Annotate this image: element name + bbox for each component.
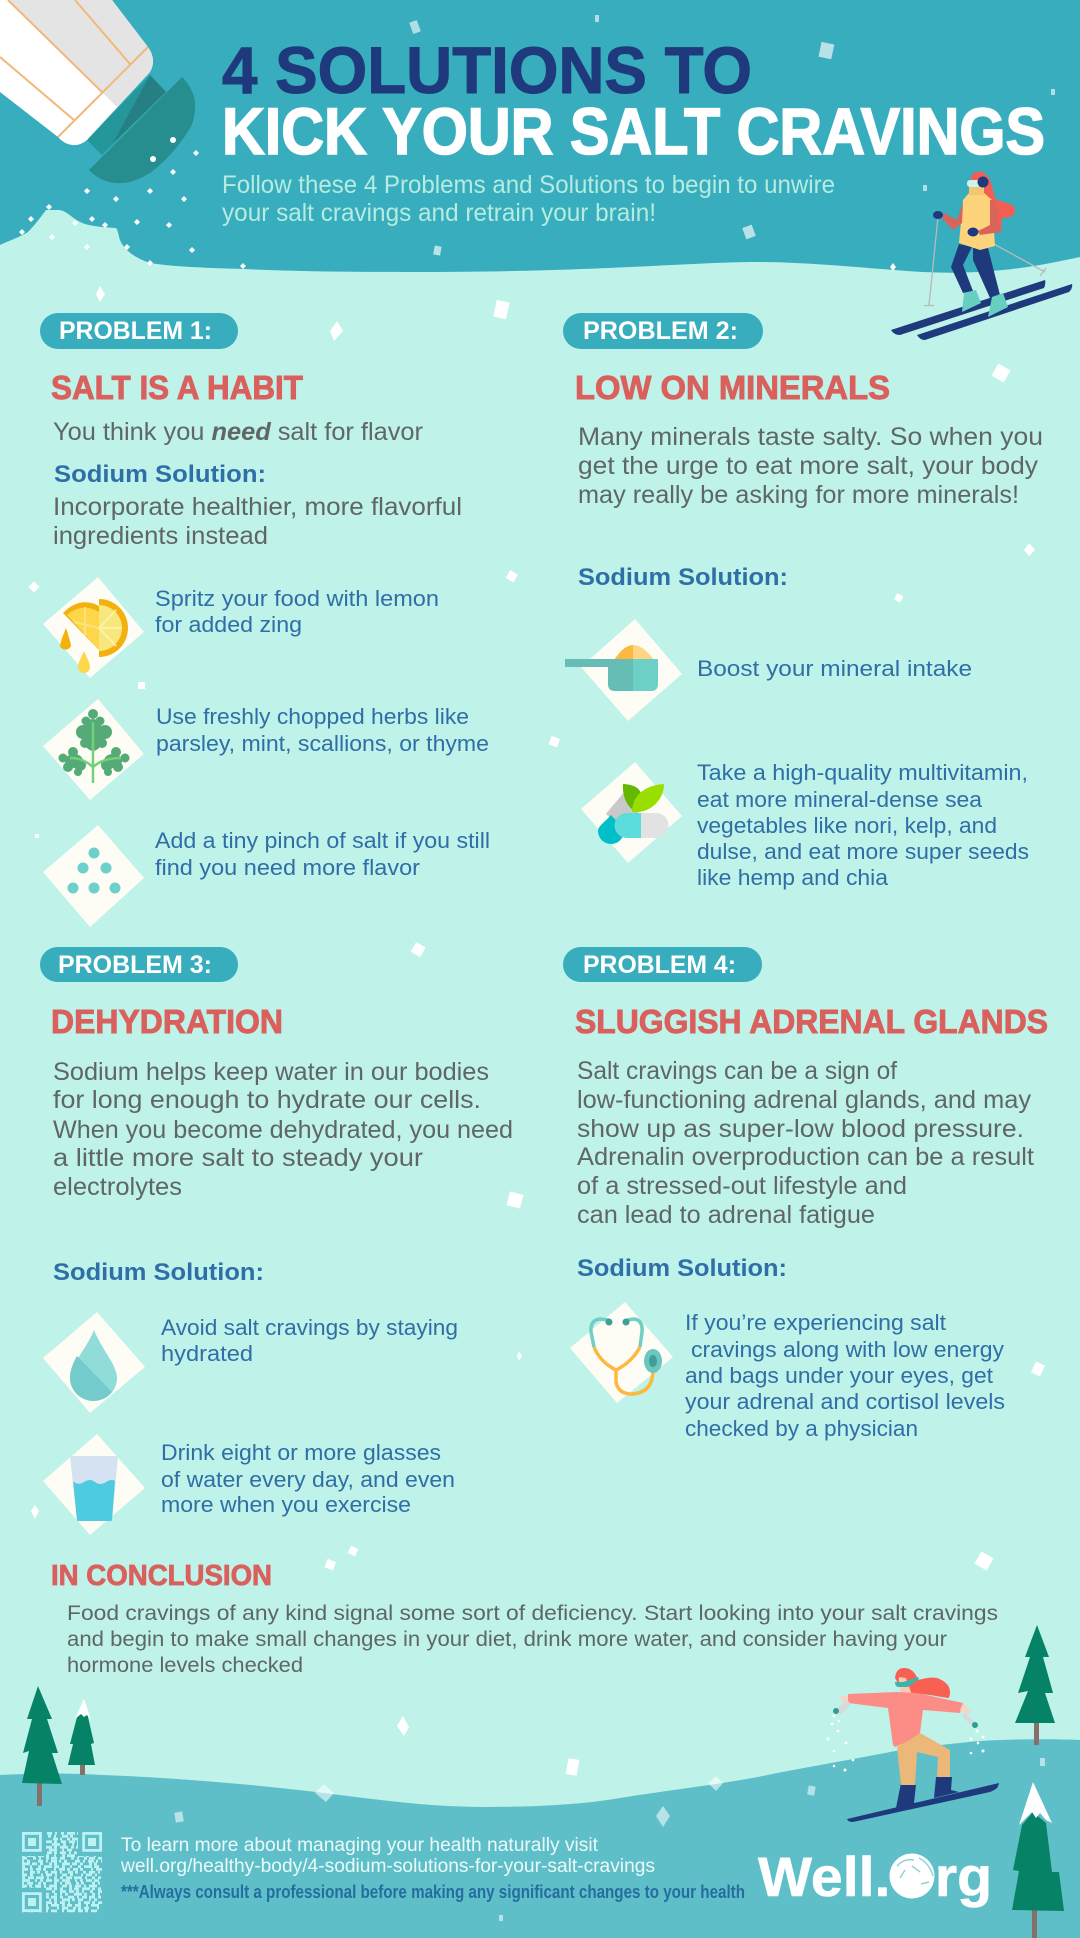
header background bbox=[0, 0, 1080, 273]
problem 4 text: Adrenalin overproduction can be a result bbox=[577, 1143, 1034, 1171]
problem 4 text bbox=[577, 1057, 1034, 1229]
icon: glass of water bbox=[43, 1434, 145, 1535]
tip: herbs bbox=[156, 704, 489, 756]
panel: problem 3 bbox=[40, 947, 513, 1535]
conclusion text: Food cravings of any kind signal some sort of deficiency. Start looking into your salt cravings bbox=[67, 1602, 998, 1625]
tree: upper right bbox=[1015, 1625, 1055, 1745]
tip: hydrate: hydrated bbox=[161, 1341, 253, 1366]
problem 4 text: low-functioning adrenal glands, and may bbox=[577, 1086, 1032, 1114]
tip: herbs: parsley, mint, scallions, or thyme bbox=[156, 731, 489, 756]
problem 1 heading: SALT IS A HABIT bbox=[51, 369, 303, 406]
sodium solution heading 4: Sodium Solution: bbox=[577, 1255, 787, 1282]
problem 2 text bbox=[578, 423, 1043, 509]
tip: multivitamin: vegetables like nori, kelp, and bbox=[697, 813, 997, 838]
tip: multivitamin: eat more mineral-dense sea bbox=[697, 787, 983, 812]
problem 3 text: electrolytes bbox=[53, 1173, 182, 1201]
illustration: snowboarder bbox=[826, 1668, 999, 1822]
tip: salt pinch: Add a tiny pinch of salt if you still bbox=[155, 828, 490, 853]
icon: herb bbox=[43, 699, 144, 800]
problem 4 pill: PROBLEM 4: bbox=[583, 951, 736, 979]
panel: conclusion bbox=[51, 1560, 998, 1677]
problem 3 pill: PROBLEM 3: bbox=[58, 951, 212, 979]
tree: lower right snowy bbox=[1012, 1782, 1064, 1938]
solution text 1: ingredients instead bbox=[53, 522, 268, 550]
tip: physician: your adrenal and cortisol levels bbox=[685, 1389, 1005, 1414]
footer text bbox=[120, 1835, 745, 1902]
tip: multivitamin: Take a high-quality multivitamin, bbox=[697, 760, 1028, 785]
icon: pills and leaves bbox=[581, 762, 682, 863]
icon: scoop bbox=[565, 619, 682, 721]
problem 3 pill bbox=[40, 947, 238, 982]
problem 3 heading: DEHYDRATION bbox=[51, 1003, 283, 1040]
sodium solution heading 2: Sodium Solution: bbox=[578, 564, 788, 591]
problem 1 pill: PROBLEM 1: bbox=[59, 317, 212, 345]
problem 3 text: for long enough to hydrate our cells. bbox=[53, 1086, 481, 1114]
icon: water drop bbox=[43, 1312, 145, 1413]
footer text: To learn more about managing your health naturally visit bbox=[121, 1835, 599, 1856]
tree: small snowy left bbox=[68, 1698, 95, 1775]
tip: salt pinch bbox=[155, 828, 490, 880]
tip: multivitamin: like hemp and chia bbox=[697, 865, 889, 890]
panel: problem 1 bbox=[40, 313, 490, 927]
tip: physician bbox=[685, 1310, 1005, 1441]
tip: glasses of water: of water every day, and even bbox=[161, 1467, 455, 1492]
logo: Well.Org: Well.Org bbox=[758, 1845, 992, 1908]
tree: far left bbox=[22, 1686, 62, 1806]
tip: salt pinch: find you need more flavor bbox=[155, 855, 420, 880]
subtitle bbox=[222, 171, 835, 227]
subtitle: Follow these 4 Problems and Solutions to begin to unwire bbox=[222, 171, 835, 199]
icon: salt pinch bbox=[43, 825, 144, 927]
icon: salt shaker bbox=[0, 0, 195, 183]
footer text: ***Always consult a professional before making any significant changes to your health bbox=[121, 1882, 745, 1902]
problem 1 pill bbox=[40, 313, 238, 349]
conclusion text bbox=[67, 1602, 998, 1677]
icon: lemon bbox=[43, 577, 144, 678]
hill snowflakes bbox=[174, 1758, 1045, 1921]
sodium solution heading 3: Sodium Solution: bbox=[53, 1259, 264, 1286]
tip: multivitamin: dulse, and eat more super seeds bbox=[697, 839, 1029, 864]
problem 4 heading: SLUGGISH ADRENAL GLANDS bbox=[575, 1003, 1048, 1040]
problem 2 text: Many minerals taste salty. So when you bbox=[578, 423, 1043, 451]
conclusion text: and begin to make small changes in your diet, drink more water, and consider having your bbox=[67, 1628, 947, 1651]
problem 4 pill bbox=[563, 947, 762, 982]
icon: stethoscope bbox=[570, 1302, 673, 1403]
title: 4 SOLUTIONS TO bbox=[222, 33, 752, 107]
footer text: well.org/healthy-body/4-sodium-solutions-for-your-salt-cravings bbox=[120, 1856, 655, 1877]
salt grains falling bbox=[19, 137, 246, 269]
solution text 1 bbox=[53, 493, 462, 550]
problem 4 text: Salt cravings can be a sign of bbox=[577, 1057, 897, 1085]
tip: glasses of water bbox=[161, 1440, 455, 1517]
illustration: skier bbox=[891, 171, 1072, 340]
QR code bbox=[22, 1832, 102, 1912]
problem 3 text: a little more salt to steady your bbox=[53, 1144, 423, 1172]
tip: lemon bbox=[155, 586, 439, 637]
tip: physician: If you’re experiencing salt bbox=[685, 1310, 946, 1335]
tip: multivitamin bbox=[697, 760, 1029, 890]
tip: physician: checked by a physician bbox=[685, 1416, 918, 1441]
tip: herbs: Use freshly chopped herbs like bbox=[156, 704, 469, 729]
footer hill bbox=[0, 1739, 1080, 1938]
problem 3 text: When you become dehydrated, you need bbox=[53, 1116, 513, 1144]
problem 1 text: You think you need salt for flavor bbox=[53, 418, 423, 446]
problem 3 text bbox=[53, 1058, 513, 1201]
problem 2 heading: LOW ON MINERALS bbox=[575, 369, 890, 406]
tip: hydrate bbox=[161, 1315, 458, 1366]
problem 2 text: get the urge to eat more salt, your body bbox=[578, 452, 1039, 480]
problem 4 text: can lead to adrenal fatigue bbox=[577, 1201, 875, 1229]
problem 2 pill bbox=[563, 313, 763, 349]
solution text 1: Incorporate healthier, more flavorful bbox=[53, 493, 462, 521]
tip: glasses of water: more when you exercise bbox=[161, 1492, 411, 1517]
panel: problem 4 bbox=[563, 947, 1048, 1441]
tip: hydrate: Avoid salt cravings by staying bbox=[161, 1315, 458, 1340]
conclusion text: hormone levels checked bbox=[67, 1654, 303, 1677]
subtitle: your salt cravings and retrain your brain! bbox=[222, 199, 656, 227]
tip: lemon: for added zing bbox=[155, 612, 302, 637]
sodium solution heading 1: Sodium Solution: bbox=[54, 461, 266, 488]
problem 2 pill: PROBLEM 2: bbox=[583, 317, 738, 345]
problem 4 text: of a stressed-out lifestyle and bbox=[577, 1172, 907, 1200]
tip: minerals: Boost your mineral intake bbox=[697, 656, 972, 681]
problem 2 text: may really be asking for more minerals! bbox=[578, 481, 1019, 509]
panel: problem 2 bbox=[563, 313, 1043, 890]
conclusion heading: IN CONCLUSION bbox=[51, 1560, 272, 1592]
tip: physician: and bags under your eyes, get bbox=[685, 1363, 993, 1388]
problem 3 text: Sodium helps keep water in our bodies bbox=[53, 1058, 489, 1086]
problem 4 text: show up as super-low blood pressure. bbox=[577, 1115, 1024, 1143]
tip: lemon: Spritz your food with lemon bbox=[155, 586, 439, 611]
tip: physician: cravings along with low energy bbox=[691, 1337, 1004, 1362]
tip: glasses of water: Drink eight or more glasses bbox=[161, 1440, 441, 1465]
title bbox=[222, 33, 1045, 168]
